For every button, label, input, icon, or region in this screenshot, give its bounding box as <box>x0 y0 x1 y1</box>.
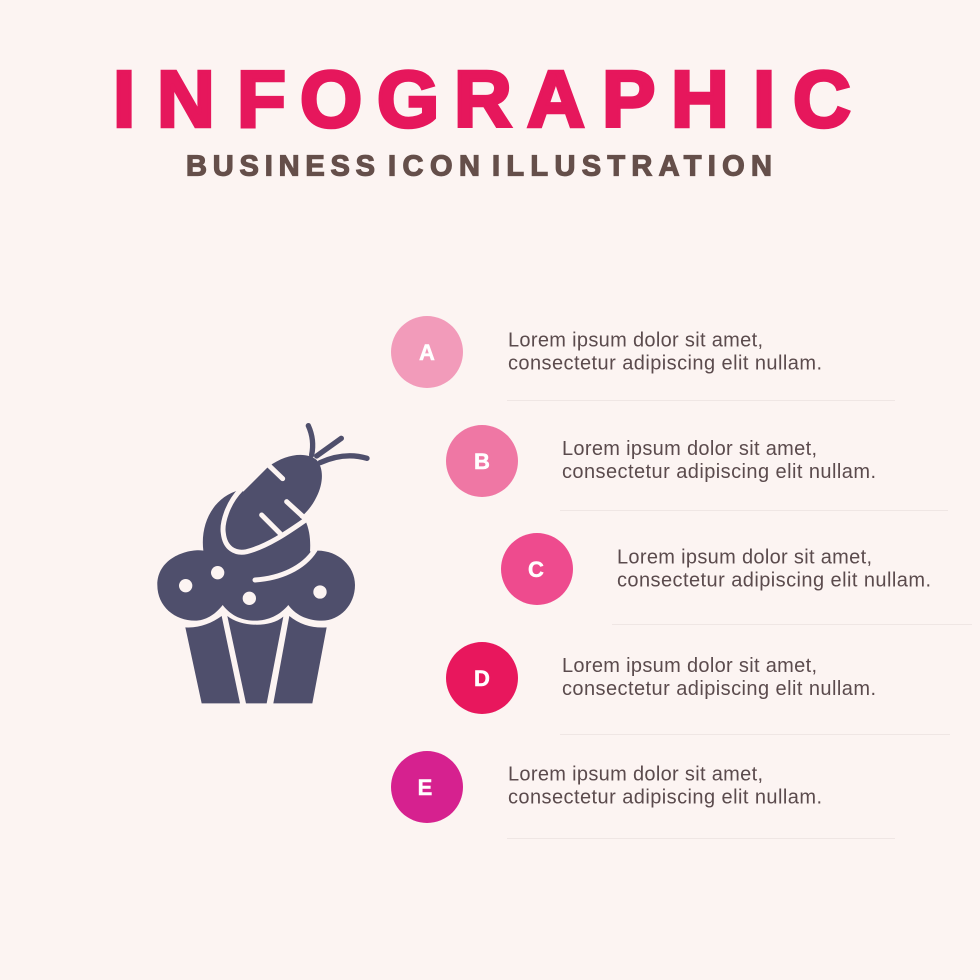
subtitle: BUSINESS <box>186 150 375 182</box>
item E: E <box>418 775 432 800</box>
carrot outline gap <box>223 489 309 552</box>
carrot notches <box>262 463 307 533</box>
item B: Lorem ipsum dolor sit amet, <box>562 438 817 460</box>
item C: Lorem ipsum dolor sit amet, <box>617 546 872 568</box>
item B <box>446 425 948 511</box>
item E <box>391 751 895 839</box>
subtitle: ICON <box>388 150 480 182</box>
item E: Lorem ipsum dolor sit amet, <box>508 764 763 786</box>
frosting <box>157 490 355 621</box>
sprinkles <box>179 566 327 605</box>
item D: D <box>474 666 490 691</box>
item B: consectetur adipiscing elit nullam. <box>562 461 876 483</box>
item C <box>501 533 972 625</box>
item C: C <box>528 557 544 582</box>
item B: B <box>474 449 490 474</box>
item D: Lorem ipsum dolor sit amet, <box>562 655 817 677</box>
item C: consectetur adipiscing elit nullam. <box>617 570 931 592</box>
item D: consectetur adipiscing elit nullam. <box>562 678 876 700</box>
item D <box>446 642 950 735</box>
item A: consectetur adipiscing elit nullam. <box>508 352 822 374</box>
item A: A <box>419 340 435 365</box>
subtitle <box>186 150 772 182</box>
item A <box>391 316 895 401</box>
frosting swirl line <box>255 550 315 580</box>
carrot leaves <box>308 426 367 463</box>
item A: Lorem ipsum dolor sit amet, <box>508 330 763 352</box>
subtitle: ILLUSTRATION <box>492 150 772 182</box>
title: INFOGRAPHIC <box>113 54 851 144</box>
icon: cupcake with carrot <box>157 426 367 703</box>
cupcake wrapper <box>185 616 327 703</box>
item E: consectetur adipiscing elit nullam. <box>508 786 822 808</box>
carrot body <box>227 455 322 548</box>
